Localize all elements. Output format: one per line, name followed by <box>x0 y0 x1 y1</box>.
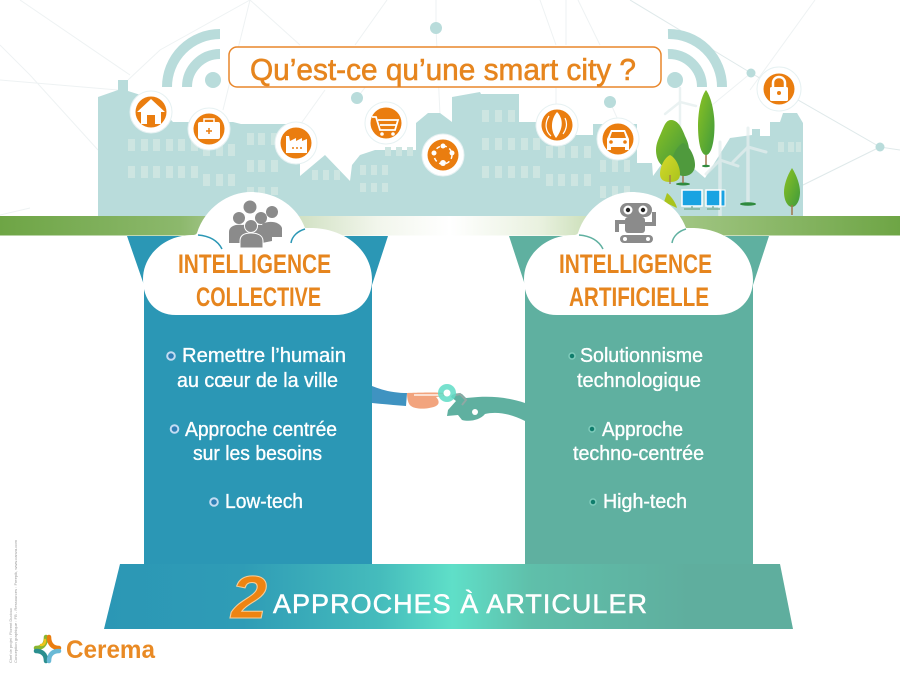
turbine base <box>740 202 756 206</box>
heading: intelligence collective: COLLECTIVE <box>196 282 321 312</box>
text block: artificielle list <box>573 345 704 513</box>
panel: pillar intelligence artificielle <box>509 236 769 565</box>
logo mark <box>36 637 59 661</box>
text block: collective list: Remettre l’humain <box>182 345 346 367</box>
heading: intelligence collective: INTELLIGENCE <box>178 249 331 279</box>
text block: collective list: sur les besoins <box>193 443 322 465</box>
credits: Conception graphique : FB - Ressources : Freepik, www.canva.com <box>13 539 18 663</box>
icon: human hand <box>372 386 446 409</box>
icon: factory <box>275 122 317 164</box>
icon: wifi right <box>667 34 722 88</box>
text block: artificielle list: techno-centrée <box>573 443 704 465</box>
trees <box>656 90 800 215</box>
icon: robot <box>617 203 654 243</box>
icon: car <box>597 118 639 160</box>
heading: intelligence artificielle: INTELLIGENCE <box>559 249 712 279</box>
icon: touch point glow <box>438 384 456 402</box>
solar panels <box>682 190 725 209</box>
number 2: 2 <box>230 564 267 631</box>
network lines right <box>630 0 900 185</box>
cloud: artificielle <box>524 192 753 315</box>
panel: pillar intelligence collective <box>127 236 388 565</box>
skyline <box>98 80 803 217</box>
icon: group of people <box>229 200 282 248</box>
icon: wifi left <box>167 34 221 88</box>
text block: collective list: au cœur de la ville <box>177 370 338 392</box>
text block: collective list <box>177 345 346 513</box>
bullets: collective <box>167 352 218 506</box>
title box <box>229 47 661 87</box>
wind turbines <box>665 88 766 216</box>
heading: intelligence collective <box>178 249 331 312</box>
text block: artificielle list: Approche <box>602 419 683 441</box>
text block: artificielle list: Solutionnisme <box>580 345 703 367</box>
icon: medical case <box>188 108 230 150</box>
icon: home <box>130 91 172 133</box>
title: Qu’est-ce qu’une smart city ? <box>250 52 636 87</box>
logo wordmark: Cerema <box>66 636 156 664</box>
green ground band <box>0 216 900 236</box>
cloud: collective <box>143 192 372 315</box>
text block: collective list: Approche centrée <box>185 419 337 441</box>
icon: connected people <box>422 134 464 176</box>
icon: padlock <box>757 67 801 111</box>
text block: collective list: Low-tech <box>225 491 303 513</box>
text block: artificielle list: High-tech <box>603 491 687 513</box>
text block: artificielle list: technologique <box>577 370 701 392</box>
network lines background <box>0 0 815 215</box>
skyline windows <box>128 110 801 198</box>
banner: 2 approches <box>104 564 793 629</box>
heading: intelligence artificielle: ARTIFICIELLE <box>569 282 709 312</box>
network nodes <box>351 22 884 152</box>
icon: leaf <box>536 104 578 146</box>
logo: Cerema <box>36 636 156 664</box>
credits <box>8 539 18 663</box>
banner text: APPROCHES À ARTICULER <box>273 589 647 619</box>
icon: cart <box>365 102 407 144</box>
icon: robot hand <box>447 393 525 421</box>
heading: intelligence artificielle <box>559 249 712 312</box>
bullets: artificielle <box>569 353 596 505</box>
credits: Chef de projet : Florent Dudoux <box>8 608 13 663</box>
